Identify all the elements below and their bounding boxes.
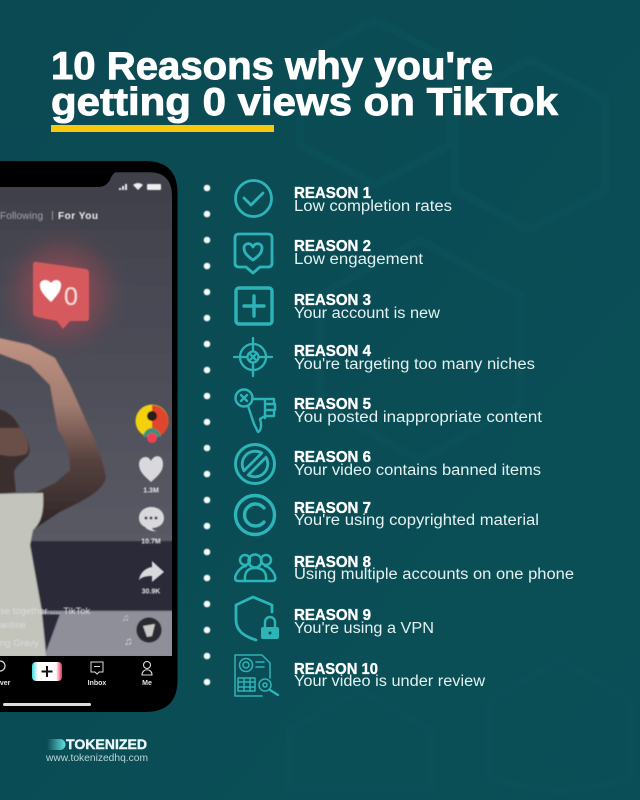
reason 5: REASON 5 [294, 396, 371, 413]
reason 7: You're using copyrighted material [294, 512, 539, 529]
profile avatar [136, 404, 169, 443]
icon: group of people [235, 554, 275, 581]
bottom nav: Inbox [88, 680, 106, 687]
music disc [123, 615, 162, 646]
reason 5: You posted inappropriate content [294, 409, 543, 426]
like bubble with zero [33, 262, 89, 329]
caption [0, 606, 91, 649]
reason 7: REASON 7 [294, 500, 371, 517]
reason 9: You're using a VPN [294, 620, 434, 637]
reason 8: Using multiple accounts on one phone [294, 566, 574, 583]
icon: heart bubble [235, 234, 272, 273]
side action icons: 30.9K [142, 588, 160, 596]
top tabs: Following [0, 211, 43, 222]
side action icons: 1.3M [143, 488, 159, 494]
icon: shield with lock [236, 597, 279, 640]
reason 6 [236, 444, 541, 484]
music disc: ♫ [124, 636, 132, 648]
phone screen photo [0, 172, 180, 657]
icon: check circle [236, 180, 272, 216]
reason 9: REASON 9 [294, 607, 371, 624]
status bar [119, 183, 161, 190]
caption: ng Gravy [0, 638, 39, 649]
side action icons [139, 456, 164, 596]
reason 2 [235, 234, 424, 273]
footer logo: TOKENIZED [66, 737, 147, 752]
reason 6: REASON 6 [294, 449, 371, 466]
side action icons: 10.7M [141, 538, 161, 546]
reason 10: Your video is under review [294, 673, 486, 690]
icon: banned circle [236, 444, 274, 484]
notch [0, 172, 116, 187]
reason 9 [236, 597, 434, 640]
reason 1 [236, 180, 452, 216]
hand and arm [0, 336, 106, 528]
top tabs [0, 211, 98, 222]
head [0, 408, 30, 496]
icon: copyright [236, 496, 274, 534]
reason 3 [236, 288, 441, 324]
shirt [0, 493, 46, 657]
bottom nav [0, 661, 152, 687]
icon: thumbs down with x [236, 390, 275, 432]
reason 2: Low engagement [294, 251, 424, 268]
dotted timeline [204, 185, 210, 685]
caption: se together .... TikTok [0, 606, 91, 617]
reason 4: You're targeting too many niches [294, 356, 535, 373]
icon: document with magnifier [235, 655, 278, 696]
reason 3: Your account is new [294, 305, 441, 322]
reason 10 [235, 655, 486, 696]
top tabs: For You [58, 211, 98, 222]
bottom nav: Me [142, 680, 152, 687]
music disc: ♫ [122, 613, 130, 624]
reason 4 [234, 338, 535, 376]
reason 8 [235, 554, 574, 583]
phone [0, 161, 180, 712]
title: getting 0 views on TikTok [51, 81, 558, 124]
title: 10 Reasons why you're [51, 45, 493, 88]
icon: plus square [236, 288, 272, 324]
icon: crosshair target [234, 338, 272, 376]
title underline [51, 125, 274, 132]
reason 10: REASON 10 [294, 661, 378, 678]
reason 7 [236, 496, 539, 534]
reason 4: REASON 4 [294, 343, 371, 360]
reason 2: REASON 2 [294, 238, 371, 255]
reason 1: REASON 1 [294, 185, 371, 202]
reason 8: REASON 8 [294, 554, 371, 571]
caption: antine [0, 620, 26, 631]
home bar [3, 703, 91, 706]
footer logo [45, 737, 148, 764]
icon: logo mark [47, 739, 66, 750]
like bubble with zero: 0 [64, 283, 78, 311]
reason 6: Your video contains banned items [294, 462, 541, 479]
title [51, 45, 558, 124]
reason 3: REASON 3 [294, 292, 371, 309]
reason 1: Low completion rates [294, 198, 452, 215]
reason 5 [236, 390, 543, 432]
footer logo: www.tokenizedhq.com [45, 752, 148, 764]
